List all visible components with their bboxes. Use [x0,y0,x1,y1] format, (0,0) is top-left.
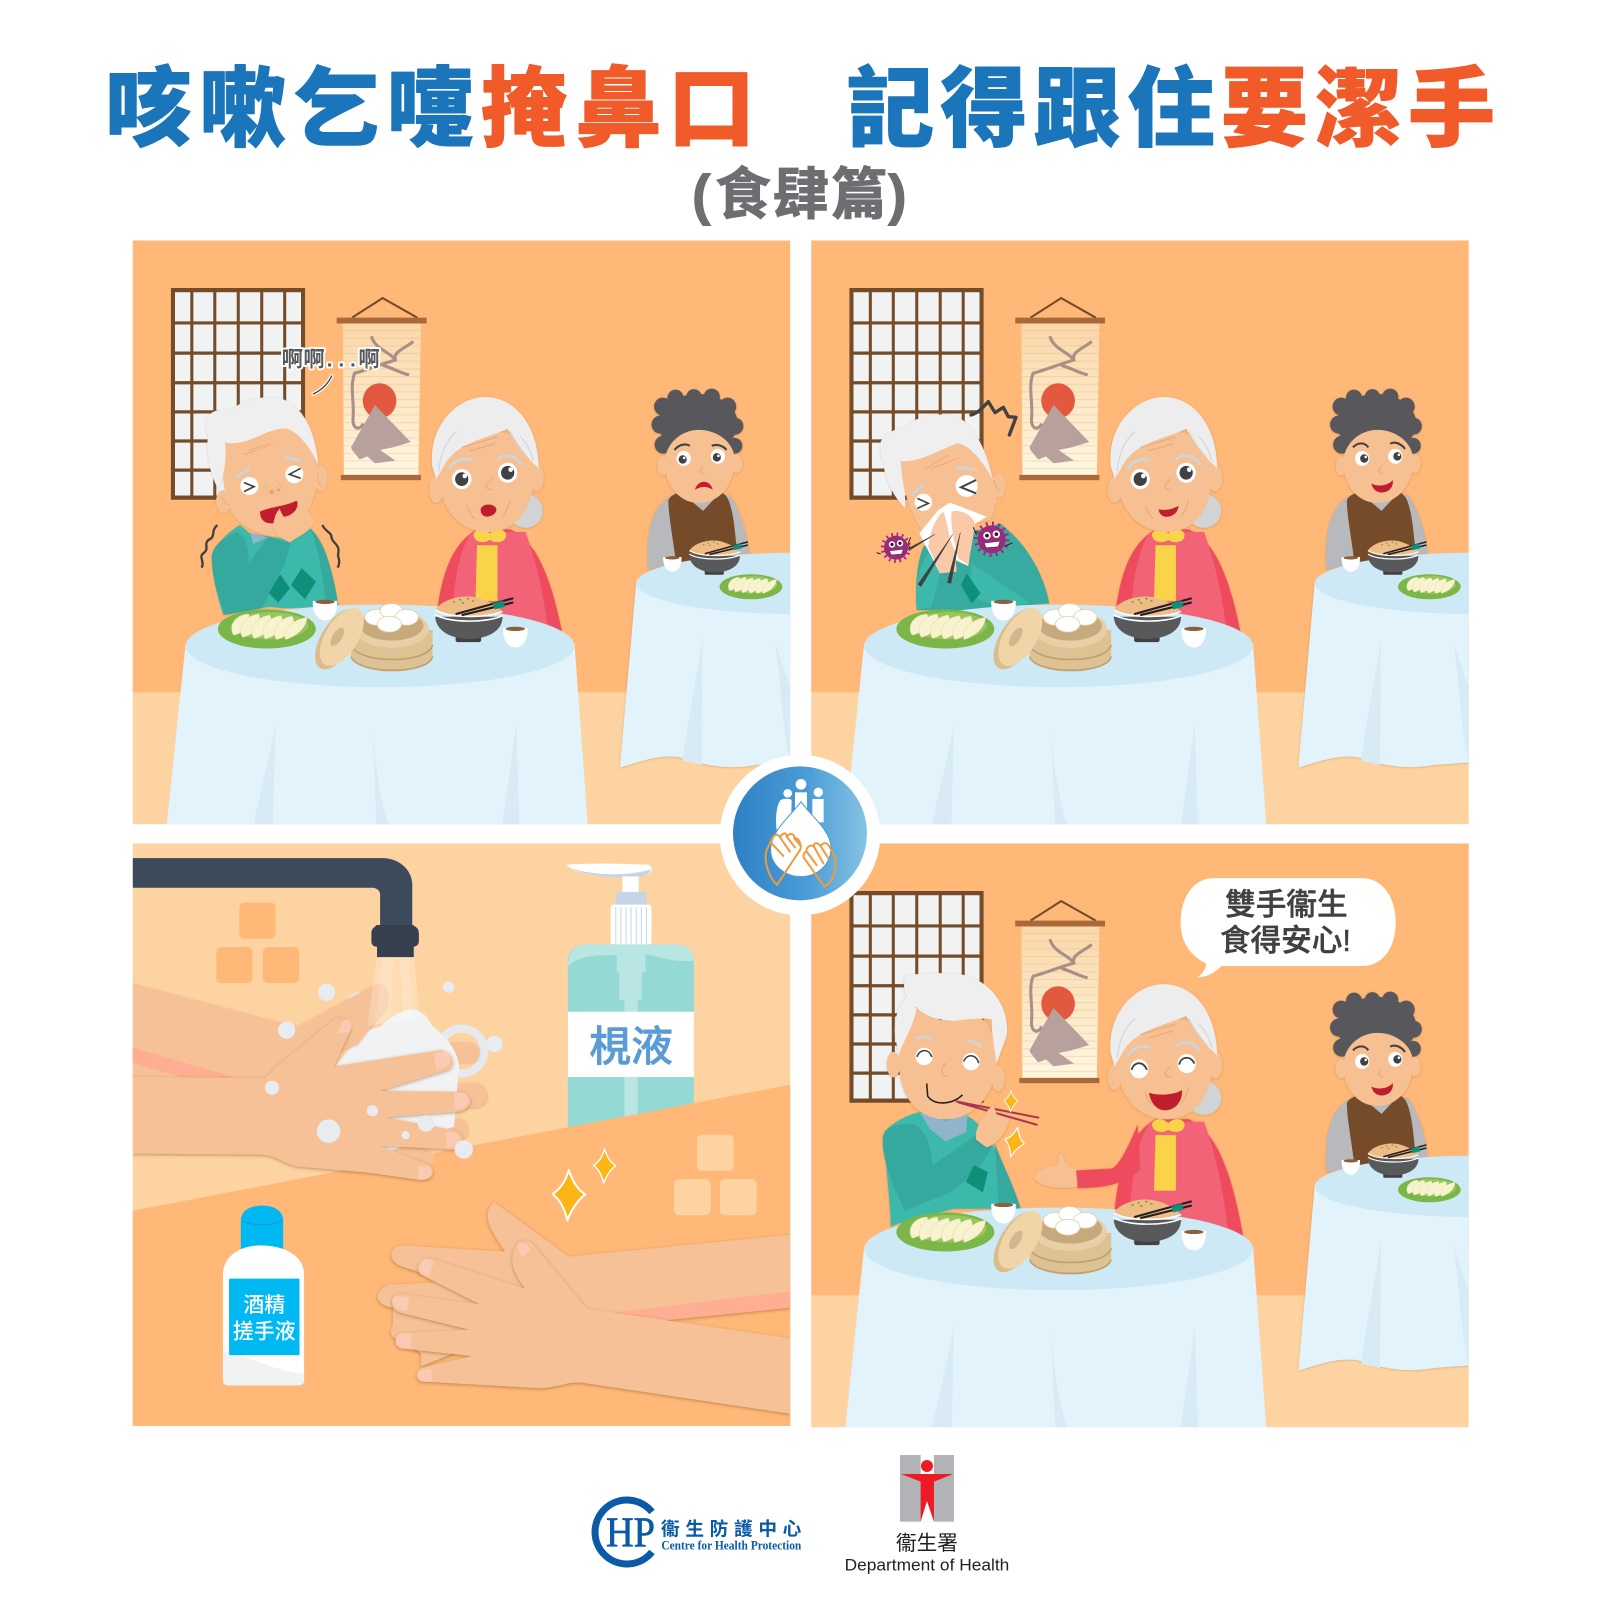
speech bubble: 雙手衞生 [1225,888,1348,922]
speech bubble: 食得安心! [1220,924,1351,958]
sanitiser bottle: 酒精 [243,1294,285,1317]
icon: virus right [973,524,1013,555]
icon: sparkles [553,1149,616,1220]
clean hands [378,1202,790,1414]
panel: happy meal after clean hands [811,843,1601,1428]
character: coughing man [201,348,380,615]
back arm washing [133,984,388,1078]
panel: hand washing and sanitiser [133,843,790,1426]
logo: Department of Health: Department of Health [845,1555,1009,1574]
logo: Centre for Health Protection: HP [606,1510,655,1557]
logo: Department of Health [845,1455,1009,1574]
character: sneezing man with viruses [877,402,1049,610]
panel: sneezing into hands [811,240,1601,825]
soap bubbles [265,982,503,1159]
subtitle: (食肆篇) [692,163,907,226]
title: 記得跟住 [847,61,1214,158]
logo: Centre for Health Protection: Centre for Health Protection [661,1538,801,1552]
pump bottle of liquid soap: 梘液 [589,1023,673,1070]
icon: virus left [877,534,911,561]
icon: people [776,779,824,830]
sound text: cough: 啊啊...啊 [282,348,380,372]
logo: Centre for Health Protection [595,1500,802,1564]
pump bottle of liquid soap [566,864,694,1137]
speech bubble [1181,878,1396,977]
icon: sparkles near chopsticks [1002,1091,1027,1159]
icon: squares lower [674,1135,757,1215]
sanitiser bottle [223,1206,304,1385]
icon: water drop [771,802,831,877]
panel: coughing at the table [133,240,956,825]
title: 掩鼻口 [481,61,755,158]
sanitiser bottle: 搓手液 [233,1320,296,1343]
annoyed squiggle [971,402,1016,435]
title: 咳嗽乞嚏 [105,61,474,158]
logo: Department of Health: 衞生署 [896,1532,958,1555]
title [105,61,1495,158]
center badge: hand hygiene icon [720,755,880,915]
front hand washing [133,1018,470,1180]
water stream [367,957,419,1026]
icon: faucet [133,858,419,957]
character: man eating happily [883,973,1039,1227]
logo: Centre for Health Protection: 衞生防護中心 [661,1518,802,1539]
foam and back fingers [334,992,488,1163]
icon: hands [766,833,836,887]
title: 要潔手 [1221,61,1495,158]
icon: squares [216,903,299,983]
